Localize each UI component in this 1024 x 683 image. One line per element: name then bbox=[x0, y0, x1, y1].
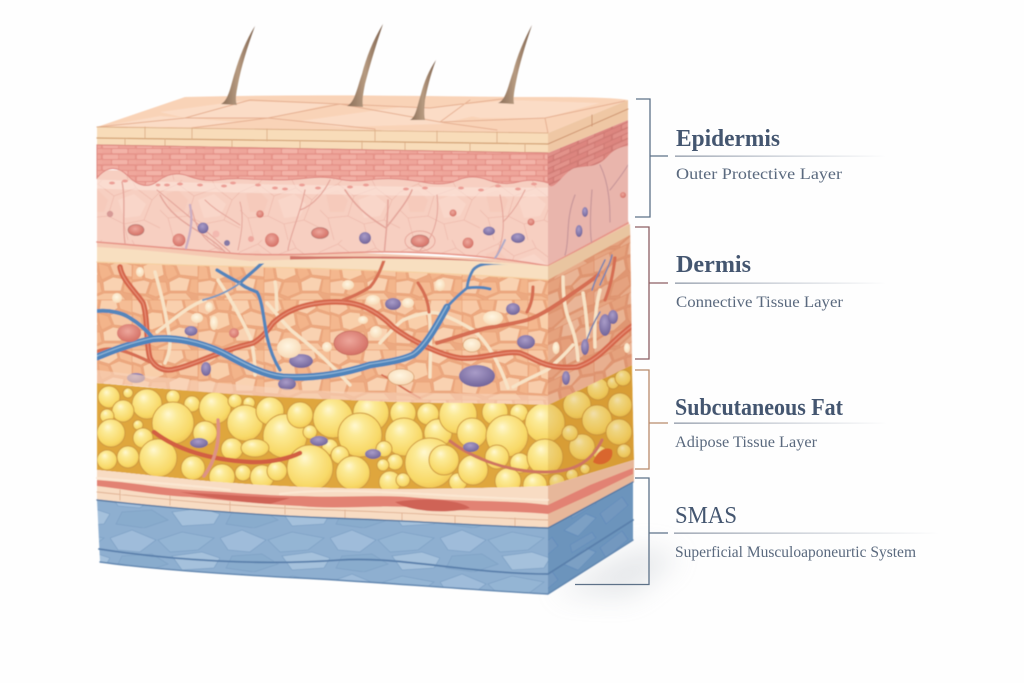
bracket: epidermis bbox=[635, 99, 668, 217]
fine capillaries bbox=[122, 165, 628, 258]
label: subcutaneous fat bbox=[674, 395, 888, 451]
subcutaneous fat layer bbox=[97, 365, 634, 497]
fat cell group: side face bbox=[562, 370, 632, 481]
SMAS blue fascia layer bbox=[97, 482, 633, 594]
bracket: SMAS bbox=[575, 478, 668, 584]
side shade bbox=[548, 365, 634, 486]
label: dermis: Connective Tissue Layer bbox=[676, 294, 844, 311]
bracket: dermis bbox=[635, 227, 668, 359]
connective strata between fat and SMAS bbox=[97, 460, 634, 528]
skin cross-section infographic bbox=[96, 24, 920, 601]
label: subcutaneous fat: Adipose Tissue Layer bbox=[675, 434, 818, 451]
fat cell group: front left bbox=[97, 386, 317, 490]
epidermis: cream strata bbox=[97, 100, 628, 153]
dermis cream top band bbox=[97, 247, 548, 280]
epidermis: pale papillary layer bbox=[96, 146, 630, 266]
label: dermis bbox=[675, 252, 887, 311]
veins bbox=[98, 255, 612, 370]
arteries bbox=[120, 267, 632, 370]
epidermis: pink keratinocyte brick layer bbox=[97, 120, 628, 186]
label: SMAS bbox=[674, 503, 940, 561]
epidermal cell nuclei bbox=[107, 192, 626, 251]
dermis rear gap filler bbox=[97, 220, 630, 280]
dermal nodules bbox=[112, 267, 630, 390]
label: epidermis: Outer Protective Layer bbox=[676, 166, 843, 183]
label: SMAS: SMAS bbox=[675, 503, 737, 529]
label: epidermis: Epidermis bbox=[676, 126, 780, 152]
dermis block bbox=[96, 224, 632, 405]
label: epidermis bbox=[675, 126, 887, 183]
fat cell group: front centre bbox=[287, 395, 477, 493]
fat vessels bbox=[154, 420, 612, 476]
fat cell group: front right bbox=[428, 402, 565, 488]
dermis lower light band bbox=[97, 370, 548, 405]
label: subcutaneous fat: Subcutaneous Fat bbox=[675, 395, 843, 421]
hair shafts bbox=[221, 24, 532, 120]
epidermis: top surface bbox=[97, 95, 628, 133]
block drop shadow bbox=[552, 548, 680, 596]
small dashes below brick layer bbox=[109, 180, 537, 192]
label: SMAS: Superficial Musculoaponeurtic System bbox=[675, 544, 917, 561]
bracket: subcutaneous fat bbox=[635, 370, 668, 469]
anatomical skin block bbox=[96, 24, 634, 594]
blood vessels and fibres bbox=[96, 247, 632, 398]
collagen fibres bbox=[155, 272, 600, 388]
label: dermis: Dermis bbox=[676, 252, 751, 278]
